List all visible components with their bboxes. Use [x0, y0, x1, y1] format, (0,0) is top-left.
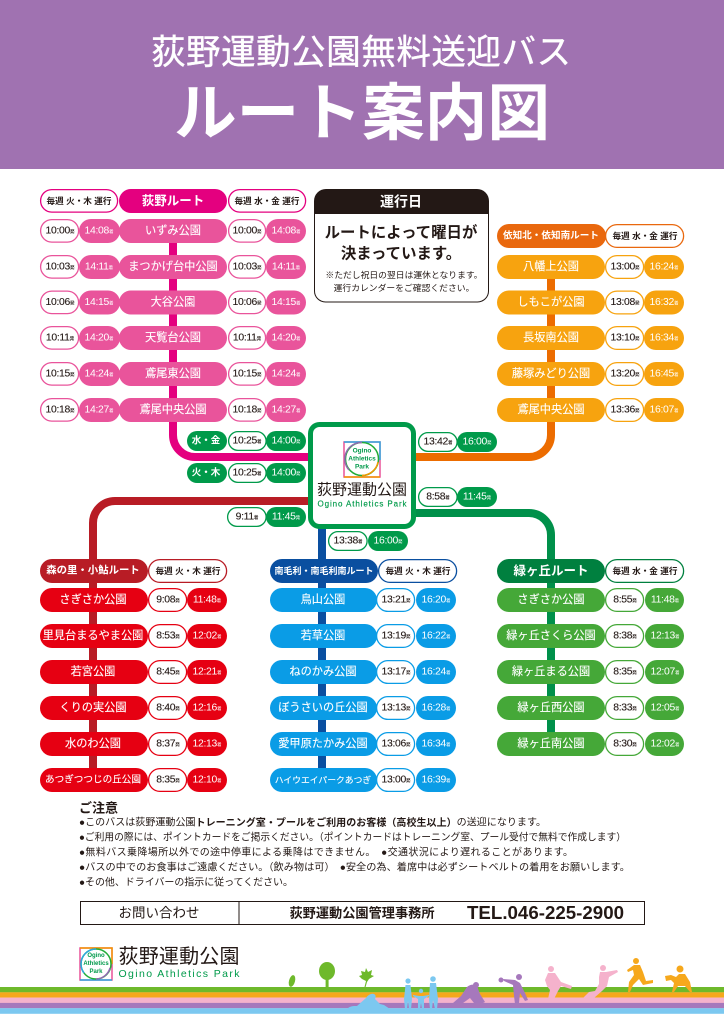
stop: さぎさか公園: 11:48着: [651, 594, 680, 606]
stop: さぎさか公園: 11:48着: [193, 594, 222, 606]
Minamimori header row: 南毛利・南毛利南ルート: [274, 565, 374, 576]
icon: park logo: Ogino: [353, 448, 371, 454]
logo japanese name: 荻野運動公園: [118, 945, 240, 968]
stop: 若草公園: 13:19発: [381, 630, 411, 642]
stop: 緑ヶ丘南公園: [497, 732, 684, 756]
stop: 長坂南公園: 16:34着: [649, 332, 679, 344]
stop: 緑ヶ丘まる公園: 12:07着: [650, 666, 680, 678]
stop: 水のわ公園: 12:13着: [192, 738, 222, 750]
stop: 若草公園: 若草公園: [301, 629, 345, 642]
stop: いずみ公園: 10:00発: [232, 226, 262, 236]
stop: ねのかみ公園: 16:24着: [421, 666, 451, 678]
schedule: Ichi park times: 16:00発: [462, 436, 492, 448]
stop: さぎさか公園: 9:08発: [156, 594, 180, 606]
route line: Minamimori: [318, 525, 326, 770]
stop: 水のわ公園: [40, 732, 227, 756]
stop: 八幡上公園: 八幡上公園: [523, 259, 579, 273]
stop: 里見台まるやま公園: 8:53発: [156, 630, 180, 642]
stop: いずみ公園: [41, 219, 306, 243]
stop: ハイウエイパークあつぎ: 13:00発: [381, 774, 411, 786]
stop: ハイウエイパークあつぎ: [270, 768, 456, 792]
operating days message: ルートによって曜日が: [325, 222, 478, 242]
stop: 里見台まるやま公園: [40, 624, 227, 648]
panel: Ogino route: [41, 189, 306, 422]
stop: 八幡上公園: [497, 255, 684, 279]
stop: 緑ヶ丘西公園: 12:05着: [650, 702, 680, 714]
route line: Morinosato: [93, 501, 312, 770]
stop: ねのかみ公園: 13:17発: [381, 666, 411, 678]
stop: 大谷公園: 10:06発: [45, 297, 75, 308]
route line: Ichi: [412, 260, 551, 457]
stop: ねのかみ公園: ねのかみ公園: [289, 665, 357, 678]
stop: さぎさか公園: さぎさか公園: [517, 592, 585, 606]
stop: 緑ヶ丘西公園: 8:33発: [613, 702, 637, 714]
icon: logo mark: Ogino: [87, 953, 105, 959]
notes list: ●無料バス乗降場所以外での途中停車による乗降はできません。 ●交通状況により遅れることがあります。: [79, 846, 573, 858]
notes heading: ご注意: [79, 800, 118, 816]
stop: 鳥山公園: 鳥山公園: [301, 592, 345, 606]
icon: logo mark: [80, 948, 112, 980]
Ogino header row: [41, 189, 306, 213]
stop: 鳶尾中央公園: [41, 398, 306, 422]
Ogino header row: 荻野ルート: [142, 193, 204, 208]
silhouettes: orange athletes: [627, 958, 692, 992]
stop: 鳶尾中央公園: 10:18発: [232, 404, 262, 416]
route line: Ogino: [173, 230, 312, 457]
Ichi header row: 毎週 水・金 運行: [613, 230, 678, 241]
Minamimori header row: [270, 559, 457, 583]
schedule: 水・金: 水・金: [192, 434, 221, 446]
stop: 鳥山公園: 13:21発: [381, 594, 411, 606]
stop: 天覧台公園: 天覧台公園: [145, 330, 201, 344]
stop: 大谷公園: 大谷公園: [151, 294, 195, 308]
stop: しもこが公園: [497, 290, 684, 314]
schedule: Midorigaoka park times: [419, 487, 497, 507]
stop: 鳶尾中央公園: 鳶尾中央公園: [139, 402, 207, 416]
stop: 若宮公園: 12:21着: [192, 666, 222, 678]
schedule: 火・木: 火・木: [192, 466, 221, 478]
stop: 緑ヶ丘さくら公園: [497, 624, 684, 648]
stop: 天覧台公園: [41, 326, 306, 350]
Ichi header row: [497, 224, 684, 248]
stop: 天覧台公園: 10:11発: [233, 332, 262, 344]
stop: しもこが公園: 13:08発: [610, 297, 640, 308]
stop: しもこが公園: しもこが公園: [517, 294, 585, 308]
footer stripes: [0, 987, 724, 1014]
stop: くりの実公園: くりの実公園: [59, 701, 127, 714]
stop: まつかげ台中公園: 10:03発: [45, 262, 75, 272]
stop: 若宮公園: 若宮公園: [71, 665, 115, 678]
stop: 緑ヶ丘西公園: 緑ヶ丘西公園: [517, 701, 585, 714]
stop: ぼうさいの丘公園: 16:28着: [421, 702, 451, 714]
stop: さぎさか公園: さぎさか公園: [59, 592, 127, 606]
schedule: 火・木: [187, 463, 306, 483]
Minamimori header row: 毎週 火・木 運行: [386, 565, 451, 576]
stop: 藤塚みどり公園: 13:20発: [610, 368, 640, 380]
stop: いずみ公園: いずみ公園: [145, 224, 201, 237]
stop: 大谷公園: 10:06発: [232, 297, 262, 308]
stop: くりの実公園: 12:16着: [192, 702, 222, 714]
park english name: Ogino Athletics Park: [318, 500, 408, 508]
stop: いずみ公園: 14:08着: [84, 226, 114, 236]
Morinosato header row: 森の里・小鮎ルート: [46, 564, 140, 576]
icon: park logo: Athletics: [348, 456, 376, 462]
stop: さぎさか公園: [497, 588, 684, 612]
panel: operating days: 運行カレンダーをご確認ください。: [334, 282, 474, 293]
notes list: ●その他、ドライバーの指示に従ってください。: [79, 876, 293, 888]
schedule: Minamimori park times: 16:00発: [373, 536, 403, 546]
stop: 長坂南公園: [497, 326, 684, 350]
stop: 八幡上公園: 16:24着: [649, 262, 679, 272]
stop: 藤塚みどり公園: 16:45着: [649, 368, 679, 380]
stop: 若草公園: 16:22着: [421, 630, 451, 642]
stop: まつかげ台中公園: 14:11着: [272, 262, 301, 272]
stop: いずみ公園: 14:08着: [271, 226, 301, 236]
stop: 水のわ公園: 8:37発: [156, 738, 180, 750]
stop: 緑ヶ丘南公園: 12:02着: [650, 738, 680, 750]
stop: ぼうさいの丘公園: ぼうさいの丘公園: [278, 701, 368, 714]
icon: park logo: Park: [355, 464, 369, 470]
panel: Morinosato route: [40, 559, 227, 792]
schedule: Morinosato park times: [228, 507, 306, 527]
stop: 緑ヶ丘西公園: [497, 696, 684, 720]
stop: しもこが公園: 16:32着: [649, 297, 679, 308]
stop: 緑ヶ丘さくら公園: 8:38発: [613, 630, 637, 642]
stop: 大谷公園: [41, 290, 306, 314]
Ogino header row: 毎週 水・金 運行: [235, 195, 300, 206]
stop: 若草公園: [270, 624, 456, 648]
schedule: Morinosato park times: 9:11着: [236, 512, 259, 522]
stop: 緑ヶ丘南公園: 8:30発: [613, 738, 637, 750]
route line: Midorigaoka: [412, 513, 551, 745]
stop: 鳥山公園: 16:20着: [421, 594, 451, 606]
office name: 荻野運動公園管理事務所: [289, 904, 435, 920]
operating days footnote: ※ただし祝日の翌日は運休となります。: [325, 269, 483, 280]
schedule: Minamimori park times: [329, 531, 408, 551]
Midorigaoka header row: 緑ヶ丘ルート: [513, 563, 589, 578]
contact table: [80, 902, 644, 924]
schedule: Ichi park times: [419, 432, 497, 452]
schedule: 水・金: 10:25着: [232, 436, 262, 446]
stop: 長坂南公園: 13:10発: [610, 332, 640, 344]
stop: あつぎつつじの丘公園: あつぎつつじの丘公園: [45, 774, 141, 786]
stop: 鳶尾中央公園: 13:36発: [610, 404, 640, 416]
stop: 長坂南公園: 長坂南公園: [523, 331, 579, 344]
main title: ルート案内図: [174, 80, 550, 148]
stop: ねのかみ公園: [270, 660, 456, 684]
panel: operating days: [314, 189, 489, 302]
stop: 緑ヶ丘まる公園: 緑ヶ丘まる公園: [512, 665, 590, 678]
icon: logo mark: Athletics: [83, 961, 109, 967]
schedule: Ichi park times: 13:42着: [423, 436, 453, 448]
notes list: ●ご利用の際には、ポイントカードをご掲示ください。（ポイントカードはトレーニング室、プール受付で無料で作成します）: [79, 830, 626, 844]
contact label: お問い合わせ: [118, 906, 200, 920]
stop: 天覧台公園: 10:11発: [46, 332, 75, 344]
stop: 鳶尾中央公園: 14:27着: [84, 404, 114, 416]
phone number: TEL.046-225-2900: [467, 903, 624, 923]
stop: まつかげ台中公園: 10:03発: [232, 262, 262, 272]
schedule: Midorigaoka park times: 8:58着: [426, 492, 450, 502]
stop: 鳶尾中央公園: 10:18発: [45, 404, 75, 416]
stop: まつかげ台中公園: まつかげ台中公園: [128, 259, 218, 273]
Morinosato header row: [40, 559, 227, 583]
stop: 鳥山公園: [270, 588, 456, 612]
notes block: [79, 800, 630, 888]
notes list: [79, 816, 630, 888]
stop: 鳶尾東公園: 10:15発: [45, 368, 75, 380]
logo english name: Ogino Athletics Park: [118, 968, 240, 980]
schedule: 水・金: 14:00発: [271, 436, 301, 446]
icon: logo mark: Park: [89, 969, 103, 975]
stop: さぎさか公園: 8:55発: [613, 594, 637, 606]
footer logo: [80, 945, 240, 980]
stop: 鳶尾東公園: 10:15発: [232, 368, 262, 380]
Midorigaoka header row: [497, 559, 684, 583]
stop: 緑ヶ丘まる公園: 8:35発: [613, 666, 637, 678]
stop: 愛甲原たかみ公園: 愛甲原たかみ公園: [278, 737, 368, 750]
silhouettes: swimmer and family: [347, 976, 438, 1009]
notes list: ●バスの中でのお食事はご遠慮ください。（飲み物は可） ●安全の為、着席中は必ずシートベルトの着用をお願いします。: [79, 860, 630, 874]
stop: 若宮公園: [40, 660, 227, 684]
stop: いずみ公園: 10:00発: [45, 226, 75, 236]
stop: ぼうさいの丘公園: 13:13発: [381, 702, 411, 714]
stop: 里見台まるやま公園: 里見台まるやま公園: [43, 628, 143, 642]
stop: 鳶尾中央公園: [497, 398, 684, 422]
stop: 鳶尾中央公園: 14:27着: [271, 404, 301, 416]
stop: 大谷公園: 14:15着: [84, 297, 114, 308]
stop: 里見台まるやま公園: 12:02着: [192, 630, 222, 642]
stop: 緑ヶ丘まる公園: [497, 660, 684, 684]
stop: まつかげ台中公園: 14:11着: [85, 262, 114, 272]
schedule: 水・金: [187, 431, 306, 451]
stop: 藤塚みどり公園: [497, 362, 684, 386]
stop: ぼうさいの丘公園: [270, 696, 456, 720]
operating days heading: 運行日: [380, 194, 422, 210]
stop: 水のわ公園: 水のわ公園: [65, 737, 121, 750]
panel: Ichi route: [497, 224, 684, 422]
subtitle: 荻野運動公園無料送迎バス: [151, 34, 571, 72]
Ichi header row: 依知北・依知南ルート: [503, 230, 599, 242]
header band: [0, 0, 724, 169]
stop: 緑ヶ丘さくら公園: 12:13着: [650, 630, 680, 642]
schedule: 火・木: 10:25着: [232, 468, 262, 478]
stop: さぎさか公園: [40, 588, 227, 612]
stop: 天覧台公園: 14:20着: [271, 332, 301, 344]
stop: あつぎつつじの丘公園: [40, 768, 227, 792]
silhouettes: pink runners: [545, 965, 618, 999]
silhouettes: nature: [288, 962, 374, 989]
panel: operating days: 決まっています。: [341, 244, 461, 262]
park name: 荻野運動公園: [317, 482, 407, 498]
stop: 愛甲原たかみ公園: 13:06発: [381, 738, 411, 750]
stop: あつぎつつじの丘公園: 12:10着: [192, 774, 222, 786]
stop: 天覧台公園: 14:20着: [84, 332, 114, 344]
silhouettes: sit-up and thrower: [453, 974, 528, 1004]
stop: 鳶尾東公園: 14:24着: [84, 368, 114, 380]
stop: 緑ヶ丘さくら公園: 緑ヶ丘さくら公園: [506, 629, 596, 642]
stop: 大谷公園: 14:15着: [271, 297, 301, 308]
stop: くりの実公園: 8:40発: [156, 702, 180, 714]
Ogino header row: 毎週 火・木 運行: [47, 195, 112, 206]
center hub: park: [310, 424, 414, 526]
stop: 愛甲原たかみ公園: 16:34着: [421, 738, 451, 750]
schedule: Morinosato park times: 11:45発: [272, 512, 301, 522]
Morinosato header row: 毎週 火・木 運行: [156, 565, 221, 576]
stop: くりの実公園: [40, 696, 227, 720]
icon: park logo: [344, 442, 380, 477]
schedule: 火・木: 14:00発: [271, 468, 301, 478]
stop: 鳶尾東公園: 14:24着: [271, 368, 301, 380]
stop: ハイウエイパークあつぎ: ハイウエイパークあつぎ: [275, 774, 371, 785]
Midorigaoka header row: 毎週 水・金 運行: [613, 565, 678, 576]
stop: あつぎつつじの丘公園: 8:35発: [156, 774, 180, 786]
notes list: ●このバスは荻野運動公園トレーニング室・プールをご利用のお客様（高校生以上）の送迎になります。: [79, 816, 546, 828]
stop: 緑ヶ丘南公園: 緑ヶ丘南公園: [517, 737, 585, 750]
stop: 鳶尾中央公園: 16:07着: [649, 404, 679, 416]
stop: 藤塚みどり公園: 藤塚みどり公園: [512, 366, 590, 380]
panel: Midorigaoka route: [497, 559, 684, 756]
stop: まつかげ台中公園: [41, 255, 306, 279]
stop: 若宮公園: 8:45発: [156, 666, 180, 678]
panel: Minamimori route: [270, 559, 457, 792]
stop: 愛甲原たかみ公園: [270, 732, 456, 756]
stop: 鳶尾東公園: [41, 362, 306, 386]
schedule: Midorigaoka park times: 11:45発: [463, 492, 492, 502]
schedule: Minamimori park times: 13:38着: [333, 536, 363, 546]
stop: 鳶尾東公園: 鳶尾東公園: [145, 366, 201, 380]
stop: 鳶尾中央公園: 鳶尾中央公園: [517, 402, 585, 416]
stop: ハイウエイパークあつぎ: 16:39着: [421, 774, 451, 786]
stop: 八幡上公園: 13:00発: [610, 262, 640, 272]
